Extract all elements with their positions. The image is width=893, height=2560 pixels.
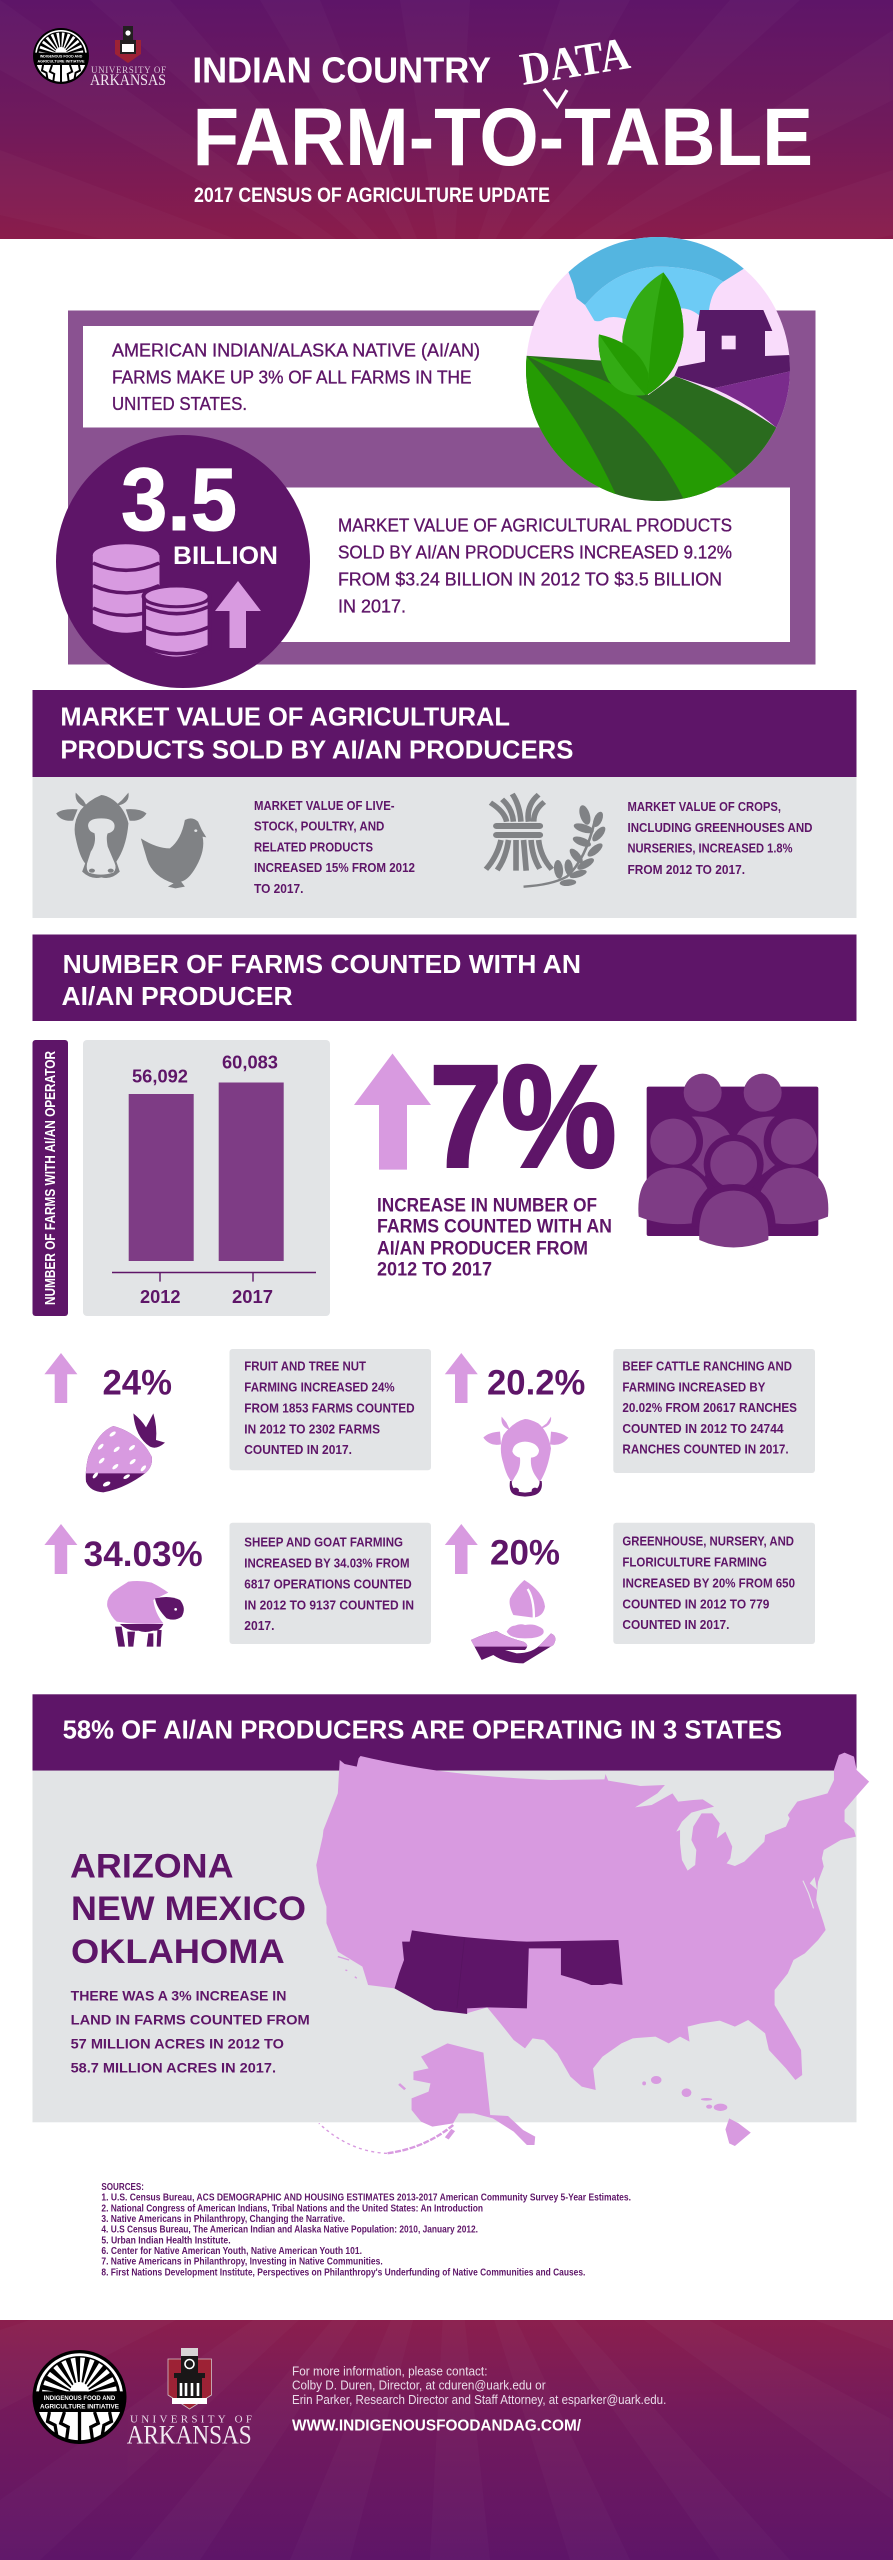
- text: livestock: MARKET VALUE OF LIVE-: [254, 799, 395, 813]
- logo: university of arkansas: UNIVERSITY OF: [91, 65, 166, 75]
- icon: grain branch: [524, 804, 608, 887]
- text box: fruit and tree nut: [230, 1349, 431, 1470]
- text box: market value: MARKET VALUE OF AGRICULTURAL PRODUCTS: [338, 516, 732, 536]
- text: three states: OKLAHOMA: [71, 1933, 285, 1971]
- text: crops: FROM 2012 TO 2017.: [628, 863, 745, 877]
- section heading: three states: 58% OF AI/AN PRODUCERS ARE OPERATING IN 3 STATES: [63, 1715, 782, 1745]
- stat: fruit and tree nut: [44, 1353, 172, 1492]
- text: increase in farms: INCREASE IN NUMBER OF: [377, 1196, 597, 1216]
- badge: 3.5 billion: 3.5: [121, 449, 237, 549]
- text box: market value: FROM $3.24 BILLION IN 2012 TO $3.5 BILLION: [338, 569, 722, 589]
- section heading: market value: MARKET VALUE OF AGRICULTURAL: [60, 702, 510, 732]
- logo: university of arkansas: ARKANSAS: [90, 72, 166, 89]
- icon: plant in hand: [471, 1580, 555, 1663]
- sources: 1. U.S. Census Bureau, ACS DEMOGRAPHIC AND HOUSING ESTIMATES 2013-2017 American Community Survey 5-Year Estimates.: [101, 2193, 631, 2204]
- icon: up arrow: [445, 1524, 478, 1574]
- text box: fruit and tree nut: FARMING INCREASED 24%: [244, 1380, 395, 1395]
- text: crops: NURSERIES, INCREASED 1.8%: [628, 842, 792, 856]
- text: increase in farms: AI/AN PRODUCER FROM: [377, 1238, 588, 1259]
- bar: 2017: 60,083: [222, 1051, 278, 1072]
- icon: up arrow: [445, 1353, 478, 1403]
- stat: beef cattle: 20.2%: [487, 1363, 585, 1402]
- icon: strawberry: [86, 1413, 165, 1492]
- text: increase in farms: FARMS COUNTED WITH AN: [377, 1217, 612, 1238]
- logo: university of arkansas: ARKANSAS: [127, 2420, 252, 2449]
- text: crops: MARKET VALUE OF CROPS,: [628, 800, 781, 814]
- text: land in farms: 58.7 MILLION ACRES IN 2017.: [71, 2059, 276, 2075]
- sources: 8. First Nations Development Institute, Perspectives on Philanthropy's Underfunding of Native Communities and Causes.: [101, 2267, 586, 2278]
- badge: 3.5 billion: BILLION: [173, 542, 278, 570]
- text box: beef cattle: [613, 1349, 815, 1473]
- text box: greenhouse and nursery: COUNTED IN 2012 TO 779: [622, 1596, 769, 1611]
- section heading: three states: [32, 1694, 856, 1771]
- text: increase in farms: [377, 1196, 612, 1280]
- text: livestock: TO 2017.: [254, 882, 304, 896]
- text box: sheep and goat: 6817 OPERATIONS COUNTED: [244, 1576, 412, 1591]
- text box: 3 percent of farms: [83, 326, 547, 428]
- section heading: market value: PRODUCTS SOLD BY AI/AN PRODUCERS: [60, 734, 573, 764]
- sources: 3. Native Americans in Philanthropy, Changing the Narrative.: [101, 2214, 345, 2225]
- logo: indigenous food and agriculture initiative: AGRICULTURE INITIATIVE: [37, 60, 85, 64]
- text box: greenhouse and nursery: INCREASED BY 20% FROM 650: [622, 1575, 795, 1590]
- section heading: market value: [32, 690, 856, 777]
- text box: fruit and tree nut: FROM 1853 FARMS COUNTED: [244, 1400, 415, 1415]
- map: hawaii: [642, 2076, 751, 2146]
- sources: 6. Center for Native American Youth, Native American Youth 101.: [101, 2246, 362, 2257]
- icon: wheat sheaf: [486, 794, 552, 871]
- text box: market value: IN 2017.: [338, 596, 406, 616]
- text: livestock: STOCK, POULTRY, AND: [254, 820, 384, 834]
- icon: up arrow: [44, 1524, 77, 1574]
- text box: sheep and goat: IN 2012 TO 9137 COUNTED IN: [244, 1597, 414, 1612]
- axis tag: number of farms: [32, 1040, 68, 1316]
- text: contact: For more information, please contact:: [292, 2363, 488, 2378]
- bar: 2012: 2012: [140, 1286, 180, 1307]
- sources: 4. U.S Census Bureau, The American Indian and Alaska Native Population: 2010, January 2012.: [101, 2225, 478, 2236]
- bar: 2017: [219, 1051, 284, 1307]
- text box: greenhouse and nursery: FLORICULTURE FARMING: [622, 1554, 767, 1569]
- sources: [101, 2182, 631, 2278]
- logo: indigenous food and agriculture initiative: [32, 2350, 127, 2444]
- bar: 2017: 2017: [232, 1286, 273, 1307]
- text box: fruit and tree nut: FRUIT AND TREE NUT: [244, 1359, 366, 1374]
- text: land in farms: LAND IN FARMS COUNTED FROM: [71, 2012, 310, 2028]
- bar chart: [83, 1040, 330, 1316]
- icon: big up arrow: [354, 1054, 431, 1170]
- map: united states: [316, 1753, 869, 2153]
- text box: beef cattle: BEEF CATTLE RANCHING AND: [622, 1358, 792, 1373]
- stat: sheep and goat: 34.03%: [84, 1535, 203, 1574]
- text box: beef cattle: FARMING INCREASED BY: [622, 1379, 766, 1394]
- logo: indigenous food and agriculture initiative: INDIGENOUS FOOD AND: [44, 2396, 116, 2402]
- states: arizona, new mexico, oklahoma: [395, 1930, 623, 2014]
- icon: up arrow: [44, 1353, 77, 1403]
- header banner: [0, 0, 893, 239]
- stat: greenhouse and nursery: [445, 1524, 560, 1663]
- icon: sheep: [107, 1581, 184, 1647]
- title: farm-to-table: FARM-TO-TABLE: [192, 92, 813, 183]
- text box: sheep and goat: INCREASED BY 34.03% FROM: [244, 1555, 410, 1570]
- text: land in farms: [71, 1988, 310, 2075]
- text: land in farms: THERE WAS A 3% INCREASE IN: [71, 1988, 286, 2004]
- sources: SOURCES:: [101, 2182, 144, 2193]
- text: crops: [628, 800, 812, 877]
- icon: up arrow: [215, 581, 261, 648]
- text box: fruit and tree nut: COUNTED IN 2017.: [244, 1442, 352, 1457]
- text box: 3 percent of farms: UNITED STATES.: [112, 394, 247, 414]
- badge: 3.5 billion: [56, 435, 310, 688]
- logo: indigenous food and agriculture initiative: INDIGENOUS FOOD AND: [40, 55, 83, 59]
- text box: beef cattle: COUNTED IN 2012 TO 24744: [622, 1421, 784, 1436]
- bar: 2012: 56,092: [132, 1066, 188, 1086]
- logo: university of arkansas: [90, 26, 166, 89]
- text: three states: [70, 1847, 306, 1971]
- stat: 7 percent: 7%: [430, 1036, 616, 1197]
- panel: overview: [56, 233, 816, 688]
- text box: greenhouse and nursery: COUNTED IN 2017.: [622, 1617, 730, 1632]
- text box: beef cattle: RANCHES COUNTED IN 2017.: [622, 1442, 789, 1457]
- stat: fruit and tree nut: 24%: [102, 1363, 172, 1402]
- title line: indian country: INDIAN COUNTRY: [192, 50, 491, 90]
- text: livestock: [254, 799, 415, 896]
- text: three states: ARIZONA: [70, 1847, 234, 1885]
- icon: group of people: [638, 1074, 828, 1247]
- text box: 3 percent of farms: FARMS MAKE UP 3% OF ALL FARMS IN THE: [112, 367, 472, 387]
- text: livestock: RELATED PRODUCTS: [254, 840, 373, 854]
- section heading: number of farms: [32, 934, 856, 1021]
- section heading: number of farms: AI/AN PRODUCER: [62, 981, 293, 1011]
- map: channel islands: [338, 1957, 357, 1978]
- text box: greenhouse and nursery: GREENHOUSE, NURSERY, AND: [622, 1534, 794, 1549]
- text box: market value: SOLD BY AI/AN PRODUCERS INCREASED 9.12%: [338, 542, 732, 562]
- logo: indigenous food and agriculture initiative: AGRICULTURE INITIATIVE: [40, 2404, 119, 2410]
- text box: sheep and goat: 2017.: [244, 1618, 274, 1633]
- text box: beef cattle: 20.02% FROM 20617 RANCHES: [622, 1400, 797, 1415]
- text: increase in farms: 2012 TO 2017: [377, 1259, 492, 1280]
- section heading: number of farms: NUMBER OF FARMS COUNTED WITH AN: [63, 949, 581, 979]
- footer banner: [0, 2320, 893, 2560]
- axis tag: number of farms: NUMBER OF FARMS WITH AI/AN OPERATOR: [42, 1051, 59, 1305]
- illustration: farm landscape: [522, 233, 795, 507]
- text box: fruit and tree nut: IN 2012 TO 2302 FARMS: [244, 1421, 380, 1436]
- text: three states: NEW MEXICO: [71, 1890, 306, 1928]
- stat: sheep and goat: [44, 1524, 203, 1647]
- text box: sheep and goat: [230, 1523, 431, 1644]
- panel: map background: [32, 1771, 856, 2122]
- text: livestock: INCREASED 15% FROM 2012: [254, 861, 415, 875]
- sources: 2. National Congress of American Indians, Tribal Nations and the United States: An Introduction: [101, 2203, 483, 2214]
- map: aleutian islands: [319, 2084, 453, 2153]
- icon: coin stacks: [93, 544, 210, 658]
- icon: cow head: [483, 1417, 568, 1497]
- text box: greenhouse and nursery: [613, 1523, 815, 1644]
- logo: university of arkansas: [127, 2348, 252, 2449]
- logo: university of arkansas: UNIVERSITY OF: [130, 2414, 252, 2426]
- text: contact: Colby D. Duren, Director, at cduren@uark.edu or: [292, 2378, 546, 2393]
- bar: 2012: [129, 1066, 194, 1307]
- sources: 5. Urban Indian Health Institute.: [101, 2235, 231, 2246]
- stat: beef cattle: [445, 1353, 585, 1497]
- text box: sheep and goat: SHEEP AND GOAT FARMING: [244, 1535, 403, 1550]
- logo: indigenous food and agriculture initiative: [33, 28, 89, 84]
- text: crops: INCLUDING GREENHOUSES AND: [628, 821, 812, 835]
- handwritten insert: data: DATA: [517, 27, 633, 95]
- subtitle: 2017 CENSUS OF AGRICULTURE UPDATE: [194, 184, 550, 207]
- text: contact: Erin Parker, Research Director and Staff Attorney, at esparker@uark.edu.: [292, 2392, 666, 2407]
- panel: market value details: [32, 777, 856, 918]
- text box: market value: [279, 488, 790, 642]
- icon: chicken: [141, 818, 206, 888]
- text: land in farms: 57 MILLION ACRES IN 2012 TO: [71, 2035, 284, 2051]
- stat: greenhouse and nursery: 20%: [490, 1533, 560, 1572]
- icon: cow: [56, 793, 146, 878]
- sources: 7. Native Americans in Philanthropy, Investing in Native Communities.: [101, 2257, 383, 2268]
- text: contact: [292, 2363, 666, 2407]
- text box: 3 percent of farms: AMERICAN INDIAN/ALASKA NATIVE (AI/AN): [112, 340, 480, 360]
- text: website: WWW.INDIGENOUSFOODANDAG.COM/: [292, 2418, 582, 2435]
- map: alaska: [412, 2043, 535, 2145]
